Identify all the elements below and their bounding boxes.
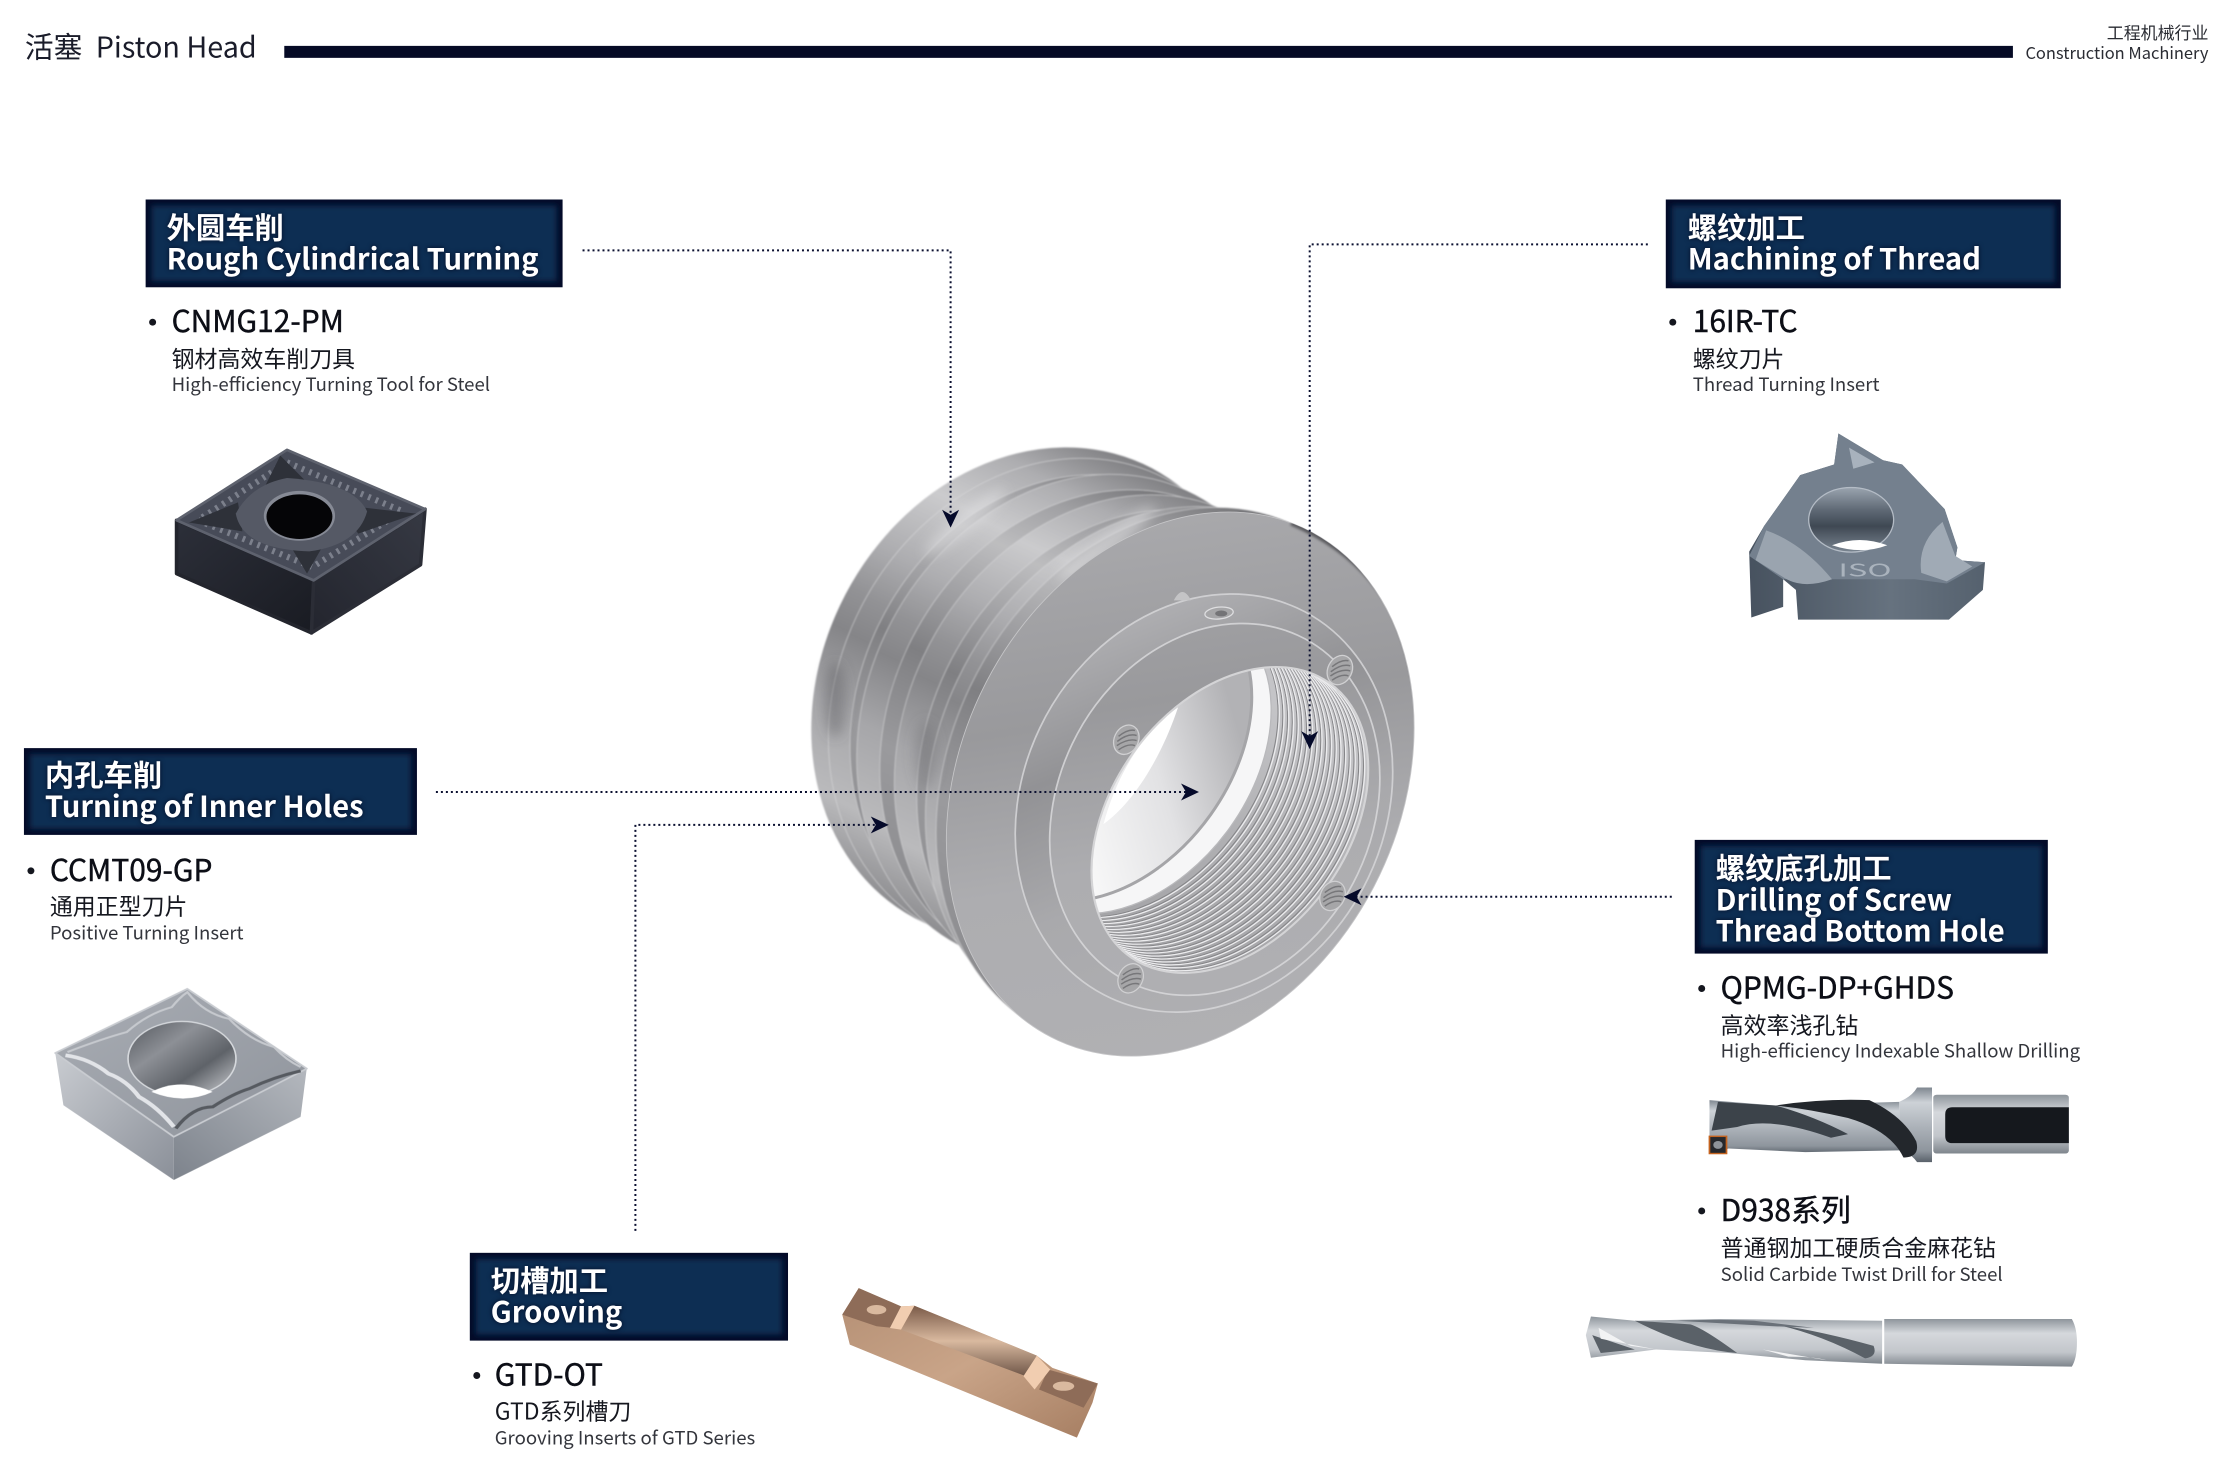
icon: dark square insert <box>177 450 425 633</box>
white opening <box>1103 707 1178 824</box>
product text: 高效率浅孔钻 <box>1721 1006 1858 1040</box>
product text: High-efficiency Turning Tool for Steel <box>172 370 490 397</box>
icon: twist drill <box>1586 1316 2077 1367</box>
banner <box>1695 840 2048 954</box>
banner: 螺纹加工 <box>1688 205 1805 247</box>
product text: QPMG-DP+GHDS <box>1721 963 1954 1007</box>
product text: 普通钢加工硬质合金麻花钻 <box>1721 1229 1996 1263</box>
product text <box>50 846 244 946</box>
product text <box>1721 1186 2003 1287</box>
product text: CCMT09-GP <box>50 846 212 890</box>
icon: grooving insert <box>842 1288 1098 1438</box>
banner <box>24 748 417 835</box>
product text <box>1693 297 1879 397</box>
piston body sections <box>731 375 1490 1123</box>
product text <box>172 297 490 397</box>
top radial hole <box>1174 592 1234 620</box>
title: 活塞 <box>25 25 82 66</box>
banner: 螺纹底孔加工 <box>1716 846 1892 888</box>
bullet <box>27 867 34 874</box>
banner: Machining of Thread <box>1688 236 1981 278</box>
central piston illustration <box>810 446 1414 1056</box>
banner <box>146 199 563 287</box>
banner: Rough Cylindrical Turning <box>167 236 539 278</box>
product text <box>1721 963 2081 1063</box>
product text: 钢材高效车削刀具 <box>172 340 355 374</box>
piston front face <box>859 437 1502 1131</box>
leader: inner holes <box>436 784 1199 800</box>
title: Piston Head <box>96 25 257 66</box>
product text: 螺纹刀片 <box>1693 340 1784 374</box>
banner: Grooving <box>491 1290 622 1332</box>
raised rings <box>947 533 1461 1073</box>
bullet <box>149 319 156 326</box>
product text: Grooving Inserts of GTD Series <box>495 1423 755 1450</box>
industry label: 工程机械行业 <box>2107 19 2208 44</box>
threaded bore <box>1092 668 1367 972</box>
industry label <box>2025 19 2209 64</box>
icon: indexable drill <box>1709 1088 2069 1162</box>
threaded screw holes <box>1109 651 1357 997</box>
icon: positive insert <box>55 989 307 1180</box>
product text: D938系列 <box>1721 1186 1851 1230</box>
surface highlights and shadows <box>824 483 1160 788</box>
product text: CNMG12-PM <box>172 297 344 341</box>
icon: thread insert: ISO <box>1838 556 1892 582</box>
product text: GTD系列槽刀 <box>495 1392 631 1426</box>
leader: machining of thread <box>1301 244 1648 749</box>
product text: Solid Carbide Twist Drill for Steel <box>1721 1260 2003 1287</box>
panel: turning of inner holes <box>24 748 417 1180</box>
product text: GTD-OT <box>495 1351 603 1395</box>
banner <box>470 1253 788 1341</box>
banner: Thread Bottom Hole <box>1716 909 2005 951</box>
product text: 16IR-TC <box>1693 297 1798 341</box>
product text: High-efficiency Indexable Shallow Drilling <box>1721 1036 2081 1063</box>
product text: 通用正型刀片 <box>50 888 188 922</box>
bullet <box>1669 319 1676 326</box>
banner: Turning of Inner Holes <box>45 784 364 826</box>
panel: machining of thread <box>1666 199 2061 620</box>
icon: thread insert <box>1749 434 1985 620</box>
banner <box>1666 199 2061 288</box>
panel: grooving <box>470 1253 1098 1450</box>
leader: drilling <box>1344 888 1672 905</box>
banner: 切槽加工 <box>491 1259 608 1301</box>
product text: Thread Turning Insert <box>1693 370 1879 397</box>
panel: drilling of screw thread bottom hole <box>1586 840 2081 1367</box>
banner: Drilling of Screw <box>1716 878 1952 920</box>
bullet <box>473 1372 480 1379</box>
banner: 内孔车削 <box>45 753 162 795</box>
industry label: Construction Machinery <box>2025 40 2209 64</box>
product text <box>495 1351 755 1450</box>
bullet <box>1698 1207 1705 1214</box>
leader: grooving <box>635 816 889 1231</box>
header bar <box>284 46 2013 58</box>
leader: rough cylindrical turning <box>583 250 959 528</box>
bullet <box>1698 985 1705 992</box>
banner: 外圆车削 <box>167 205 284 247</box>
panel: rough cylindrical turning <box>146 199 563 633</box>
title <box>25 25 257 66</box>
product text: Positive Turning Insert <box>50 919 244 946</box>
